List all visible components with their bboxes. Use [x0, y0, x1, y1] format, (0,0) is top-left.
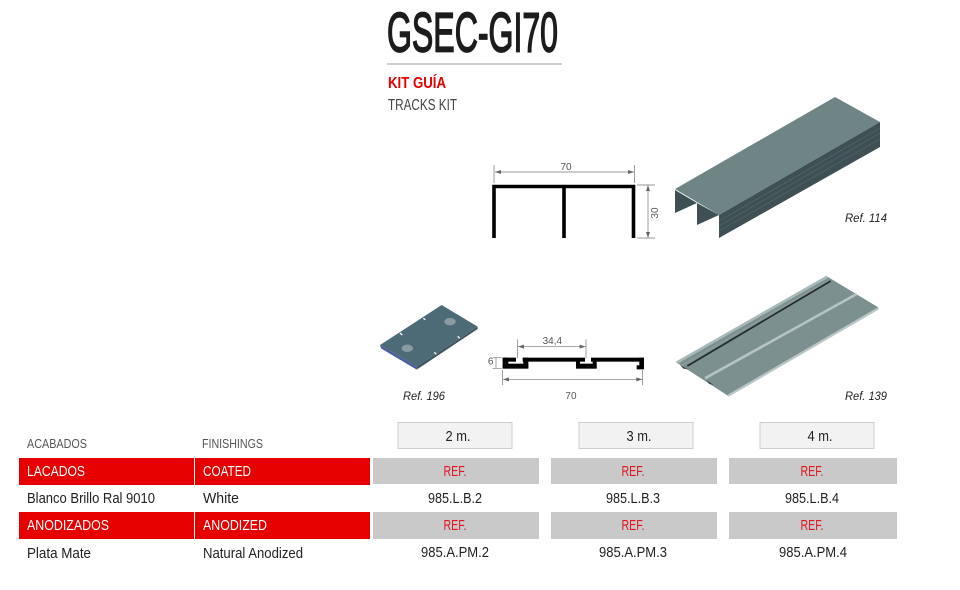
row: coated header [19, 458, 897, 485]
diagram: base track cross-section [488, 336, 644, 402]
row: white finish: Blanco Brillo Ral 9010 [27, 491, 155, 507]
row: natural anodized finish [27, 545, 847, 562]
row: anodized header: REF. [444, 518, 466, 534]
row: anodized header: REF. [800, 518, 824, 534]
row: natural anodized finish: Natural Anodized [203, 546, 303, 562]
subtitle: Spanish: KIT GUÍA [388, 75, 446, 92]
row: anodized header: ANODIZADOS [27, 517, 109, 534]
length header: 2 m. [398, 422, 512, 448]
row: white finish: 985.L.B.3 [606, 491, 660, 507]
subtitle: English: TRACKS KIT [388, 97, 457, 114]
diagram: base track cross-section: 6 [488, 357, 494, 368]
row: coated header: COATED [203, 463, 251, 480]
table headers: FINISHINGS [202, 437, 263, 451]
row: white finish [27, 491, 839, 507]
row: coated header: REF. [444, 464, 466, 480]
length header: 4 m. [760, 422, 874, 448]
length header: 4 m.: 4 m. [808, 429, 832, 445]
illustration: track 3D, Ref. 114 [675, 97, 880, 238]
diagram: track cross-section 70 x 30: 70 [560, 162, 572, 173]
title: GSEC-GI70 [387, 0, 558, 64]
label: Ref. 114: Ref. 114 [845, 211, 887, 225]
row: natural anodized finish: 985.A.PM.2 [421, 545, 489, 561]
table headers [27, 437, 263, 451]
row: natural anodized finish: 985.A.PM.4 [779, 545, 847, 561]
row: white finish: 985.L.B.4 [785, 491, 839, 507]
length header: 3 m.: 3 m. [626, 429, 652, 445]
label: Ref. 139: Ref. 139 [845, 389, 887, 403]
row: anodized header: REF. [622, 518, 644, 534]
table headers: ACABADOS [27, 437, 87, 451]
row: white finish: 985.L.B.2 [428, 491, 482, 507]
diagram: track cross-section 70 x 30: 30 [650, 207, 661, 219]
diagram: base track cross-section: 34,4 [543, 336, 562, 347]
diagram: track cross-section 70 x 30 [494, 162, 661, 238]
row: anodized header [19, 512, 897, 539]
length header: 2 m.: 2 m. [446, 429, 470, 445]
illustration: plate, Ref. 196 [380, 305, 478, 370]
row: coated header: REF. [800, 464, 824, 480]
row: anodized header: ANODIZED [203, 517, 267, 534]
illustration: base track 3D, Ref. 139 [677, 277, 878, 396]
length header: 3 m. [579, 422, 693, 448]
row: natural anodized finish: Plata Mate [27, 546, 91, 562]
label: Ref. 196: Ref. 196 [403, 389, 445, 403]
row: coated header: LACADOS [27, 463, 85, 480]
diagram: base track cross-section: 70 [565, 391, 577, 402]
row: natural anodized finish: 985.A.PM.3 [599, 545, 667, 561]
row: white finish: White [203, 491, 239, 507]
row: coated header: REF. [622, 464, 644, 480]
